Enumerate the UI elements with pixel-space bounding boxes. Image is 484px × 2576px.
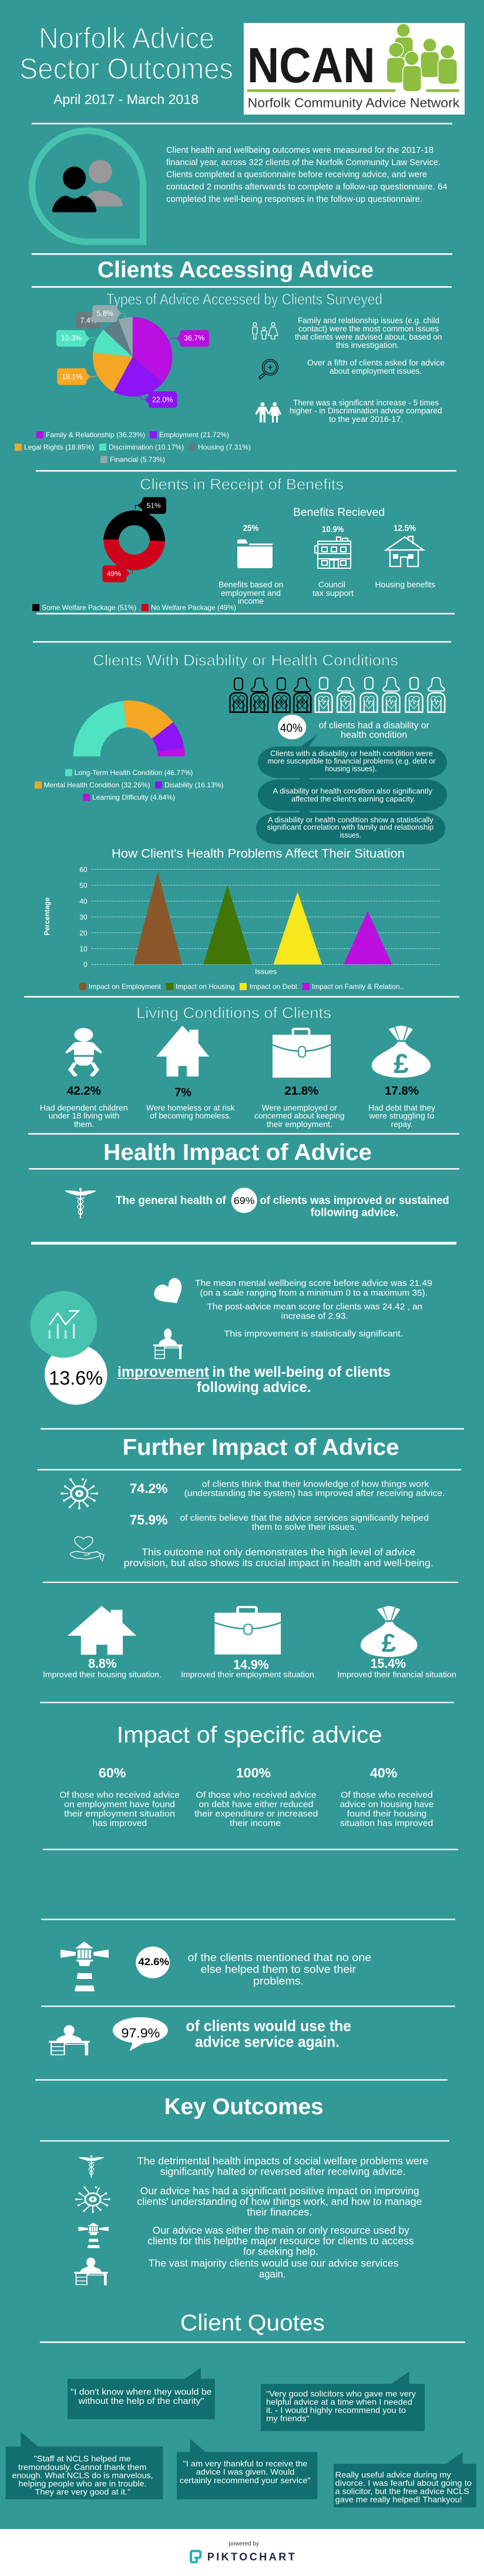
stat: general health: following advice. bbox=[311, 1206, 398, 1219]
legend: health problems: Impact on Housing bbox=[176, 982, 234, 991]
stat: unemployed: Were unemployed or bbox=[262, 1103, 337, 1112]
quote 4 bbox=[177, 2439, 317, 2499]
stat: finances improved: £ bbox=[382, 1629, 396, 1658]
callout: 51% bbox=[135, 497, 166, 514]
stat: homeless: 7% bbox=[174, 1086, 191, 1099]
heading: clients accessing advice: Clients Accessing Advice bbox=[98, 257, 374, 283]
stat: 60% employment: Of those who received advice bbox=[59, 1790, 180, 1800]
legend: types of advice: Discrimination (10.17%) bbox=[109, 443, 184, 451]
icon: lighthouse bbox=[60, 1941, 109, 1991]
stat: 75.9%: them to solve their issues. bbox=[252, 1523, 357, 1532]
stat: employment benefits bbox=[219, 524, 283, 605]
stat: 40% housing: 40% bbox=[370, 1765, 397, 1780]
stat: housing improved: 8.8% bbox=[88, 1656, 117, 1671]
key outcome: health: significantly halted or reversed after receiving advice. bbox=[160, 2166, 405, 2178]
stat: 74.2% bbox=[130, 1480, 445, 1498]
stat: 40% housing: situation has improved bbox=[340, 1818, 433, 1828]
title: April 2017 - March 2018 bbox=[53, 92, 199, 107]
stat: general health: The general health of bbox=[116, 1194, 226, 1207]
key outcome: resource: Our advice was either the main or only resource used by bbox=[153, 2225, 409, 2236]
legend: welfare: Some Welfare Package (51%) bbox=[42, 603, 136, 612]
stat: debt: were struggling to bbox=[368, 1112, 435, 1121]
key outcome: understanding: their finances. bbox=[247, 2206, 312, 2218]
stat: 40% housing: advice on housing have bbox=[340, 1799, 433, 1809]
stat: homeless: of becoming homeless. bbox=[150, 1112, 231, 1121]
heading: disability: Clients With Disability or Health Conditions bbox=[93, 652, 398, 669]
callout: 22.0%: 22.0% bbox=[152, 396, 173, 404]
speech bubble: financial problems: more susceptible to financial problems (e.g. debt or bbox=[268, 757, 436, 765]
key outcome: resource bbox=[79, 2222, 414, 2258]
title bbox=[19, 22, 233, 107]
donut chart: welfare bbox=[102, 497, 166, 582]
stat: council tax support: 10.9% bbox=[322, 525, 344, 535]
quote 5: a solicitor, but the free advice NCLS bbox=[335, 2487, 469, 2496]
stat: employment improved: Improved their employment situation. bbox=[181, 1670, 317, 1679]
stat: 97.9%: advice service again. bbox=[195, 2032, 340, 2050]
heading: health impact: Health Impact of Advice bbox=[103, 1140, 372, 1165]
stat: 97.9% bbox=[113, 2017, 351, 2051]
chart: health problems: Percentage bbox=[43, 897, 51, 935]
quote 1: without the help of the charity" bbox=[78, 2396, 204, 2406]
stat: general health bbox=[65, 1188, 449, 1219]
stat: council tax support bbox=[312, 525, 354, 598]
intro text: Client health and wellbeing outcomes were measured for the 2017-18 bbox=[166, 146, 433, 155]
key outcome: use again: again. bbox=[259, 2268, 286, 2280]
chart: health problems: 60 bbox=[79, 866, 88, 874]
stat: 13.6% improvement bbox=[31, 1291, 391, 1405]
stat: 100% debt bbox=[194, 1765, 318, 1828]
quote 2: it. - I would highly recommend you to bbox=[266, 2405, 406, 2414]
legend: types of advice bbox=[15, 431, 251, 464]
speech bubble: earning capacity: A disability or health condition also significantly bbox=[273, 786, 432, 796]
intro text: financial year, across 322 clients of the Norfolk Community Law Service. bbox=[166, 158, 441, 167]
quote 2 bbox=[261, 2372, 425, 2431]
footer: powered by Piktochart bbox=[191, 2541, 295, 2563]
text: wellbeing scores: increase of 2.93. bbox=[281, 1312, 348, 1321]
title: Sector Outcomes bbox=[19, 52, 233, 85]
heading: benefits received: Benefits Recieved bbox=[293, 507, 385, 519]
stat: housing benefits: 12.5% bbox=[394, 524, 416, 534]
quote 4: certainly recommend your service" bbox=[180, 2476, 311, 2485]
icon: Piktochart logo bbox=[191, 2551, 200, 2562]
heading: clients in receipt of benefits: Clients in Receipt of Benefits bbox=[140, 475, 344, 493]
speech bubble: financial problems bbox=[258, 734, 447, 778]
stat: employment improved: 14.9% bbox=[233, 1657, 269, 1672]
speech bubble: financial problems: housing issues). bbox=[325, 764, 377, 773]
stat: dependent children: them. bbox=[74, 1120, 94, 1129]
stat: council tax support: Council bbox=[318, 581, 345, 589]
stat: 40% housing: Of those who received bbox=[341, 1790, 433, 1800]
callout: 49%: 49% bbox=[107, 570, 121, 578]
text: wellbeing scores: (on a scale ranging from a minimum 0 to a maximum 35). bbox=[200, 1289, 428, 1298]
text: discrimination: to the year 2016-17. bbox=[329, 415, 403, 424]
stat: debt: £ bbox=[394, 1048, 409, 1079]
icon: person at desk bbox=[49, 2025, 90, 2055]
text: employment issues bbox=[307, 358, 445, 375]
icon row: people with disability bbox=[230, 677, 445, 712]
heading: health problems chart: How Client's Health Problems Affect Their Situation bbox=[112, 847, 405, 861]
stat: general health: 69% bbox=[234, 1195, 255, 1206]
intro text: Clients completed a questionnaire before receiving advice, and were bbox=[166, 170, 427, 180]
legend: welfare: No Welfare Package (49%) bbox=[151, 603, 236, 612]
icon: sun eye bbox=[60, 1478, 98, 1510]
key outcome: resource: for seeking help. bbox=[243, 2246, 318, 2258]
text: employment issues: Over a fifth of clients asked for advice bbox=[307, 358, 445, 367]
legend: health problems bbox=[79, 982, 404, 991]
legend: health conditions: Long-Term Health Condition (46.77%) bbox=[75, 769, 193, 777]
quote 5: divorce. I was fearful about going to bbox=[335, 2478, 472, 2487]
stat: 42.6%: problems. bbox=[253, 1975, 304, 1987]
text: family issues: contact) were the most common issues bbox=[298, 324, 439, 333]
icon: magnifier bbox=[259, 360, 278, 379]
quote 3: enough. What NCLS do is marvelous, bbox=[12, 2470, 153, 2480]
quote 1: "I don't know where they would be bbox=[70, 2387, 211, 2397]
quote 3: tremondously. Cannot thank them bbox=[18, 2462, 147, 2471]
stat: 13.6% improvement: in the well-being of clients bbox=[213, 1364, 391, 1380]
stat: debt: Had debt that they bbox=[368, 1103, 435, 1112]
legend: types of advice: Employment (21.72%) bbox=[159, 431, 229, 439]
stat: dependent children: under 18 living with bbox=[48, 1112, 119, 1121]
stat: dependent children bbox=[40, 1028, 128, 1129]
stat: finances improved bbox=[337, 1606, 456, 1679]
stat: employment benefits: Benefits based on bbox=[219, 581, 283, 589]
legend: health problems: Impact on Family & Relation.. bbox=[312, 982, 404, 991]
chart: health problems: 20 bbox=[79, 929, 88, 937]
stat: 97.9%: 97.9% bbox=[121, 2026, 160, 2040]
stat: housing improved bbox=[43, 1606, 162, 1679]
quote 5: Really useful advice during my bbox=[335, 2470, 451, 2479]
legend: health conditions: Mental Health Condition (32.26%) bbox=[44, 781, 150, 789]
key outcome: understanding: Our advice has had a significant positive impact on improving bbox=[140, 2185, 419, 2197]
callout: 19.1% bbox=[57, 368, 98, 385]
speech bubble: financial problems: Clients with a disability or health condition were bbox=[270, 749, 433, 758]
icon: clients pin bbox=[32, 130, 143, 242]
icon: family bbox=[253, 323, 278, 339]
quote 1 bbox=[68, 2368, 215, 2419]
quote 3: "Staff at NCLS helped me bbox=[34, 2454, 131, 2463]
text: discrimination: There was a significant increase - 5 times bbox=[293, 398, 439, 407]
stat: homeless: Were homeless or at risk bbox=[146, 1103, 234, 1112]
heading: impact of specific advice: Impact of specific advice bbox=[117, 1722, 382, 1747]
quote 5: gave me really helped! Thankyou! bbox=[335, 2495, 462, 2504]
callout: 7.4%: 7.4% bbox=[80, 317, 97, 325]
benefits received panel bbox=[219, 507, 435, 605]
stat: debt: 17.8% bbox=[385, 1085, 419, 1098]
callout: 51%: 51% bbox=[147, 501, 161, 509]
stat: unemployed bbox=[254, 1029, 344, 1129]
stat: 13.6% improvement: improvement bbox=[117, 1364, 210, 1380]
stat: 74.2%: (understanding the system) has improved after receiving advice. bbox=[184, 1489, 445, 1498]
stat: 60% employment bbox=[59, 1765, 180, 1828]
stat: employment benefits: employment and bbox=[221, 589, 281, 598]
intro text bbox=[166, 146, 448, 204]
stat: 42.6% bbox=[136, 1947, 371, 1987]
icon: caduceus bbox=[65, 1188, 96, 1218]
heading: living conditions: Living Conditions of Clients bbox=[136, 1004, 331, 1022]
text: wellbeing scores: The post-advice mean score for clients was 24.42 , an bbox=[207, 1303, 422, 1312]
stat: 75.9% bbox=[130, 1512, 429, 1532]
chart: health problems: 50 bbox=[79, 881, 88, 890]
stat: 40%: 40% bbox=[280, 722, 302, 734]
heading: key outcomes: Key Outcomes bbox=[164, 2094, 324, 2119]
stat: 100% debt: their expenditure or increased bbox=[194, 1809, 318, 1819]
stat: 75.9%: of clients believe that the advice services significantly helped bbox=[180, 1514, 429, 1523]
quote 5 bbox=[334, 2452, 476, 2507]
key outcome: use again: The vast majority clients would use our advice services bbox=[149, 2257, 399, 2269]
legend: health conditions: Learning Difficulty (4.84%) bbox=[92, 793, 175, 801]
legend: types of advice: Housing (7.31%) bbox=[198, 443, 251, 451]
speech bubble: family correlation: A disability or health condition show a statistically bbox=[268, 816, 433, 824]
stat: homeless bbox=[146, 1025, 234, 1121]
icon: rising chart bbox=[49, 1311, 78, 1339]
stat: 60% employment: their employment situation bbox=[64, 1809, 175, 1819]
icon: heart bbox=[154, 1278, 182, 1303]
legend: health problems: Impact on Debt bbox=[250, 982, 298, 991]
quote 3: helping people who are in trouble. bbox=[19, 2478, 147, 2488]
text: discrimination: higher - in Discrimination advice compared bbox=[290, 407, 442, 415]
stat: 100% debt: on debt have either reduced bbox=[199, 1799, 313, 1809]
quote 4: advice I was given. Would bbox=[196, 2467, 294, 2477]
text: outcome statement bbox=[124, 1547, 433, 1568]
stat: unemployed: concerned about keeping bbox=[254, 1112, 344, 1121]
stat: 100% debt: 100% bbox=[236, 1765, 271, 1780]
stat: 40%: health condition bbox=[341, 730, 407, 740]
pie chart: types of advice bbox=[56, 305, 209, 408]
stat: 40% bbox=[278, 715, 429, 740]
intro text: contacted 2 months afterwards to complete a follow-up questionnaire. 64 bbox=[166, 182, 448, 192]
chart: health problems bbox=[43, 866, 441, 991]
stat: 75.9%: 75.9% bbox=[130, 1512, 167, 1527]
callout: 19.1%: 19.1% bbox=[62, 373, 82, 381]
stat: debt bbox=[368, 1025, 435, 1129]
stat: debt: repay. bbox=[391, 1120, 413, 1129]
chart: health problems: Issues bbox=[255, 968, 277, 976]
quote 4: "I am very thankful to receive the bbox=[183, 2459, 308, 2468]
speech bubble: family correlation: significant correlation with family and relationship bbox=[267, 823, 433, 831]
text: wellbeing scores bbox=[195, 1279, 432, 1339]
stat: 42.6%: 42.6% bbox=[138, 1956, 169, 1968]
stat: 100% debt: their income bbox=[230, 1818, 281, 1828]
stat: 60% employment: 60% bbox=[99, 1765, 126, 1780]
key outcome: resource: clients for this helpthe major resource for clients to access bbox=[147, 2235, 414, 2247]
icon: person at desk bbox=[153, 1329, 183, 1359]
legend: health problems: Impact on Employment bbox=[89, 982, 161, 991]
legend: health conditions bbox=[35, 769, 223, 801]
quote 3 bbox=[6, 2432, 163, 2499]
legend: types of advice: Family & Relationship (36.23%) bbox=[46, 431, 145, 439]
text: family issues: this investigation. bbox=[336, 341, 399, 350]
key outcome: health bbox=[79, 2155, 428, 2178]
heading: types of advice: Types of Advice Accessed by Clients Surveyed bbox=[106, 290, 382, 308]
stat: finances improved: Improved their financial situation bbox=[337, 1670, 456, 1679]
callout: 36.7% bbox=[169, 330, 209, 347]
heading: client quotes: Client Quotes bbox=[180, 2310, 325, 2336]
callout: 36.7%: 36.7% bbox=[184, 334, 204, 342]
heading: further impact: Further Impact of Advice bbox=[123, 1435, 399, 1460]
stat: 40%: of clients had a disability or bbox=[319, 720, 429, 730]
semi donut chart bbox=[73, 700, 185, 756]
stat: housing benefits: Housing benefits bbox=[375, 581, 435, 589]
stat: 40% housing: found their housing bbox=[347, 1809, 426, 1819]
quote 2: my friends" bbox=[266, 2413, 310, 2423]
callout: 22.0% bbox=[140, 391, 177, 408]
stat: finances improved: 15.4% bbox=[371, 1656, 406, 1671]
stat: housing benefits bbox=[375, 524, 435, 589]
stat: 100% debt: Of those who received advice bbox=[196, 1790, 317, 1800]
chart: health problems: 10 bbox=[79, 945, 88, 953]
chart: health problems: 30 bbox=[79, 913, 88, 921]
stat: 42.6%: else helped them to solve their bbox=[201, 1964, 356, 1975]
stat: 13.6% improvement: following advice. bbox=[197, 1379, 311, 1396]
legend: types of advice: Financial (5.73%) bbox=[110, 455, 165, 464]
quote 2: helpful advice at a time when I needed bbox=[266, 2397, 412, 2406]
text: discrimination bbox=[290, 398, 442, 424]
callout: 5.8%: 5.8% bbox=[96, 310, 113, 318]
text: family issues bbox=[295, 316, 442, 350]
stat: general health: of clients was improved or sustained bbox=[260, 1194, 449, 1207]
stat: 60% employment: on employment have found bbox=[64, 1799, 175, 1809]
callout: 49% bbox=[102, 565, 133, 582]
text: employment issues: about employment issues. bbox=[330, 367, 422, 375]
icon: hand and heart bbox=[70, 1537, 104, 1561]
callout: 7.4% bbox=[76, 312, 101, 328]
logo: NCAN: Norfolk Community Advice Network bbox=[248, 95, 460, 110]
callout: 5.8% bbox=[92, 305, 125, 322]
footer: powered by Piktochart: PIKTOCHART bbox=[207, 2551, 295, 2563]
chart: health problems: 0 bbox=[83, 961, 88, 969]
text: outcome statement: provision, but also shows its crucial impact in health and well-being. bbox=[124, 1558, 433, 1568]
stat: unemployed: 21.8% bbox=[284, 1085, 319, 1098]
text: wellbeing scores: The mean mental wellbeing score before advice was 21.49 bbox=[195, 1279, 432, 1289]
stat: employment benefits: 25% bbox=[243, 524, 258, 534]
key outcome: health: The detrimental health impacts of social welfare problems were bbox=[137, 2155, 428, 2167]
key outcome: understanding bbox=[75, 2185, 422, 2218]
text: wellbeing scores: This improvement is statistically significant. bbox=[224, 1329, 403, 1339]
stat: 13.6% improvement: 13.6% bbox=[49, 1367, 103, 1389]
text: family issues: that clients were advised about, based on bbox=[295, 333, 442, 341]
stat: 42.6%: of the clients mentioned that no one bbox=[188, 1951, 371, 1963]
key outcome: understanding: clients' understanding of how things work, and how to manage bbox=[137, 2195, 422, 2207]
legend: health conditions: Disability (16.13%) bbox=[164, 781, 223, 789]
stat: 74.2%: 74.2% bbox=[130, 1481, 167, 1496]
speech bubble: family correlation bbox=[256, 810, 445, 844]
callout: 10.3% bbox=[56, 330, 96, 347]
stat: dependent children: Had dependent children bbox=[40, 1103, 128, 1112]
legend: welfare bbox=[32, 603, 236, 612]
icon: couple bbox=[255, 402, 281, 422]
chart: health problems: 40 bbox=[79, 897, 88, 905]
stat: 97.9%: of clients would use the bbox=[186, 2017, 351, 2034]
stat: council tax support: tax support bbox=[312, 589, 354, 598]
quote 2: "Very good solicitors who gave me very bbox=[266, 2389, 416, 2398]
callout: 10.3%: 10.3% bbox=[61, 334, 82, 342]
speech bubble: earning capacity: affected the client's earning capacity. bbox=[291, 794, 415, 803]
stat: 74.2%: of clients think that their knowledge of how things work bbox=[202, 1480, 429, 1490]
legend: types of advice: Legal Rights (18.85%) bbox=[24, 443, 94, 451]
title: Norfolk Advice bbox=[39, 22, 214, 55]
text: outcome statement: This outcome not only demonstrates the high level of advice bbox=[142, 1547, 415, 1558]
logo: NCAN bbox=[244, 23, 465, 115]
text: family issues: Family and relationship issues (e.g. child bbox=[298, 316, 439, 325]
footer: powered by Piktochart: powered by bbox=[228, 2541, 259, 2547]
stat: 60% employment: has improved bbox=[93, 1818, 147, 1828]
stat: employment benefits: income bbox=[238, 597, 264, 605]
speech bubble: earning capacity bbox=[258, 777, 447, 811]
quote 3: They are very good at it." bbox=[35, 2487, 130, 2496]
logo: NCAN: NCAN bbox=[247, 38, 375, 93]
key outcome: use again bbox=[74, 2257, 399, 2285]
stat: employment improved bbox=[181, 1607, 317, 1679]
speech bubble: family correlation: issues. bbox=[340, 831, 361, 839]
stat: unemployed: their employment. bbox=[267, 1120, 332, 1129]
intro text: completed the well-being responses in the follow-up questionnaire. bbox=[166, 195, 422, 204]
stat: housing improved: Improved their housing situation. bbox=[43, 1670, 162, 1679]
stat: 40% housing bbox=[340, 1765, 433, 1828]
stat: dependent children: 42.2% bbox=[67, 1085, 101, 1098]
